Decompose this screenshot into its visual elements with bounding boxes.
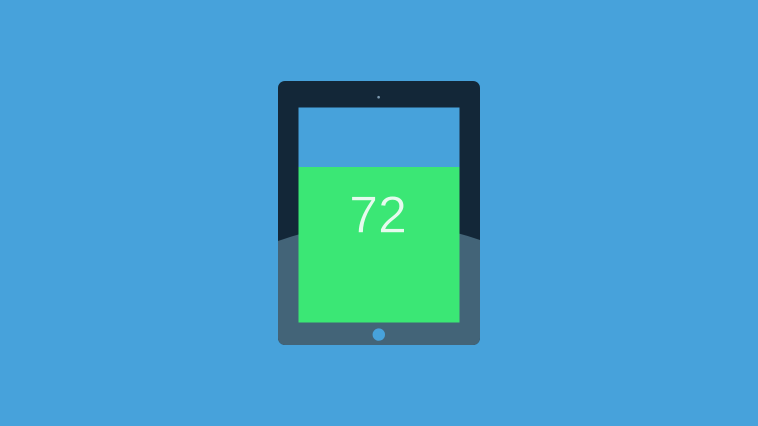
tablet body (278, 81, 480, 345)
lighter lower body reflection (278, 223, 480, 345)
infographic: tablet with fill level (278, 81, 480, 345)
icon: home button (373, 328, 385, 341)
screen green fill level (298, 167, 460, 322)
screen empty area (298, 108, 460, 168)
number: 72: 72 (349, 186, 407, 244)
icon: camera dot (377, 96, 380, 98)
